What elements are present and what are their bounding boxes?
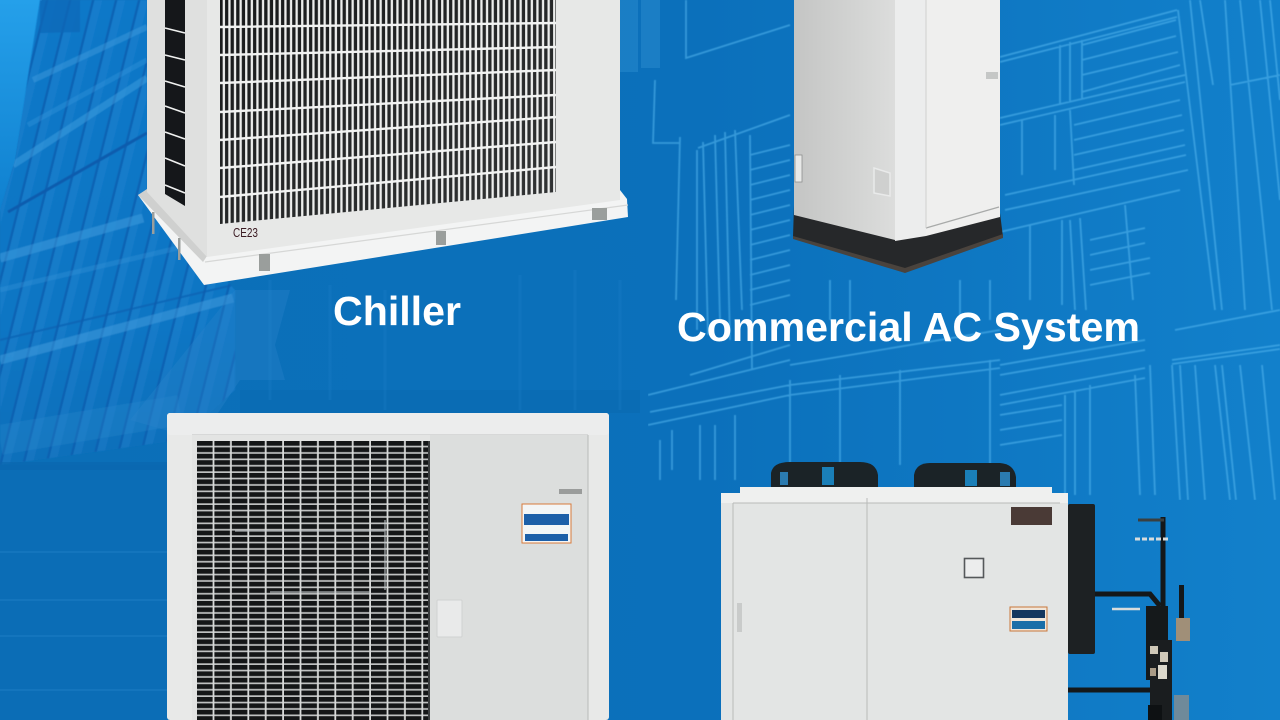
front fan grille: [220, 0, 556, 225]
code mark: CE23: [233, 225, 258, 240]
label: commercial AC system: Commercial AC System: [677, 304, 1140, 350]
corner face: [895, 0, 926, 241]
service panel: [430, 435, 588, 720]
side vents: [165, 0, 185, 206]
side handle: [795, 155, 802, 182]
vent panel: [874, 168, 890, 196]
base plate: [138, 190, 628, 285]
blueprint hatch block: [620, 0, 660, 72]
fan right: [914, 463, 1016, 487]
handle box: [437, 600, 462, 637]
cabinet front: [207, 0, 620, 257]
door handle: [737, 603, 742, 632]
sky: [0, 0, 42, 212]
plinth: [793, 205, 1003, 272]
cabinet: [167, 413, 609, 720]
unit: condenser with side grille: [167, 413, 609, 720]
door: [926, 0, 1000, 236]
side black box: [1068, 504, 1095, 654]
rating label: [522, 504, 571, 543]
door latch: [986, 72, 998, 79]
top cap: [167, 413, 609, 435]
warning label: [1010, 607, 1047, 631]
label: chiller: Chiller: [333, 288, 461, 334]
control switch: [964, 558, 984, 578]
left face: [794, 0, 895, 240]
nameplate: [1011, 507, 1052, 525]
lower street shapes: [130, 290, 290, 440]
fan grille: [197, 441, 430, 720]
mounting brackets: [152, 208, 607, 271]
pipework: [1068, 517, 1190, 720]
brand plate: [559, 489, 582, 494]
blueprint lines: [648, 0, 1280, 500]
building facade: [0, 0, 234, 462]
cabinet body: [721, 493, 1068, 720]
fan left: [771, 462, 878, 487]
cabinet side: [147, 0, 207, 257]
top cap: [721, 487, 1068, 503]
unit: rooftop condenser: [721, 462, 1095, 720]
unit: commercial AC cabinet: [793, 0, 1003, 273]
unit: chiller: [138, 0, 628, 285]
grille frame: [192, 435, 430, 720]
